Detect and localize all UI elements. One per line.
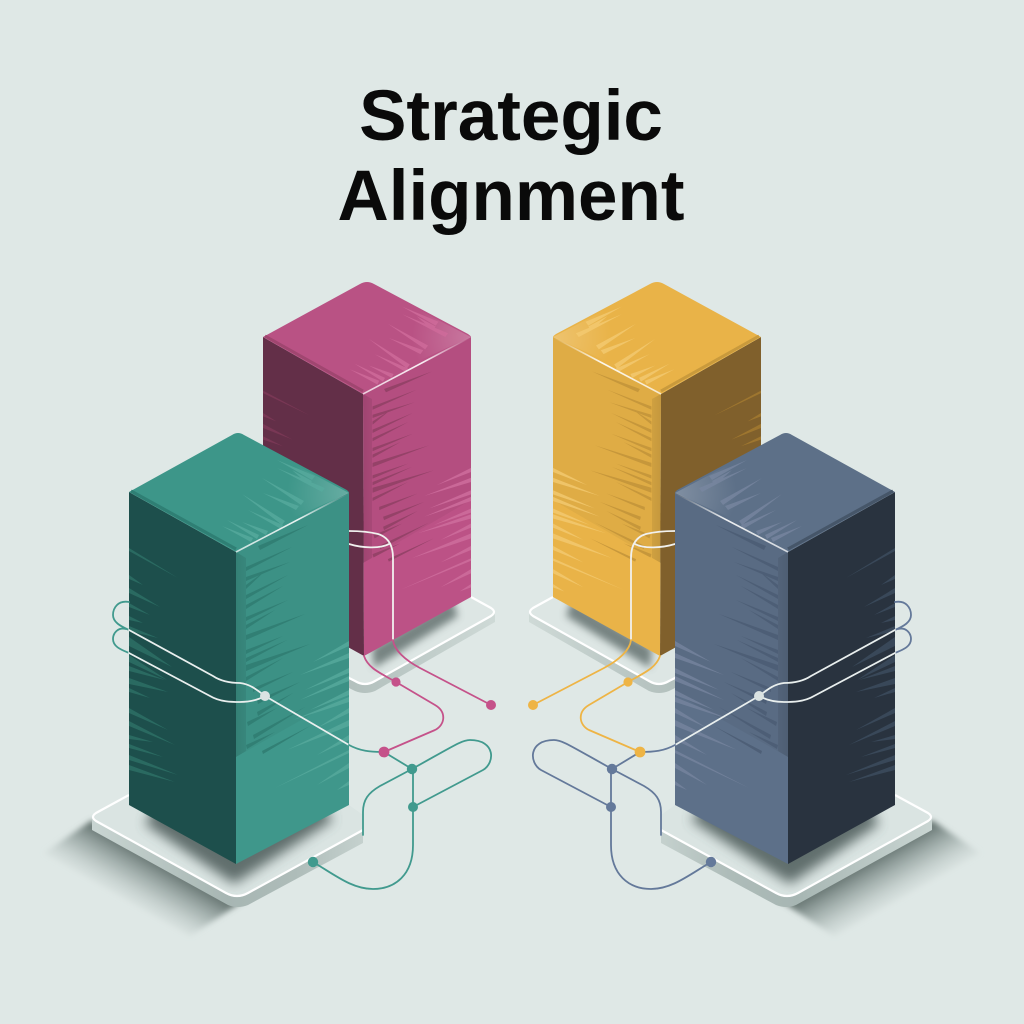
junction node: yellow [635, 747, 645, 757]
pillar: slate blue with base [661, 433, 980, 936]
pillar: teal with base [44, 433, 363, 936]
title: Strategic [359, 77, 663, 156]
cables: magenta [349, 531, 496, 752]
cables: yellow [528, 531, 675, 752]
pillar: magenta with base [263, 282, 495, 693]
title second line: Alignment [337, 157, 685, 236]
cables: teal [113, 602, 491, 889]
pillar: yellow with base [529, 282, 761, 693]
junction node: magenta [379, 747, 389, 757]
cables: slate blue [533, 602, 911, 889]
